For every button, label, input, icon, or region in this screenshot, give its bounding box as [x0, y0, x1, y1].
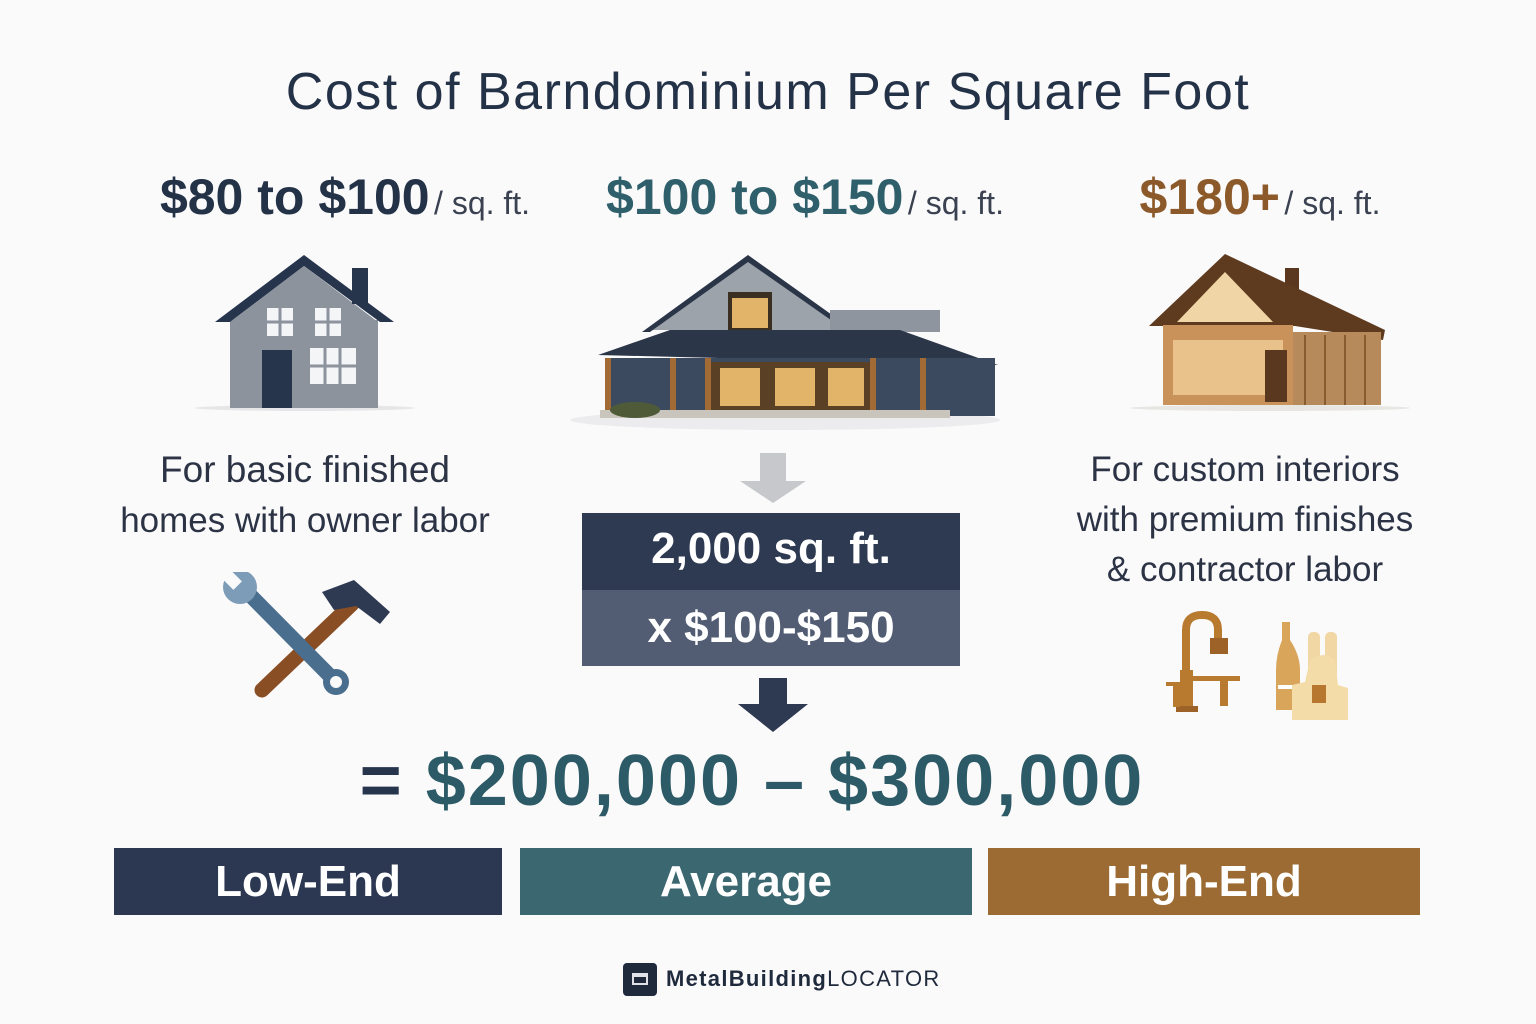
calculation box [582, 513, 960, 666]
bar: high-end: High-End [1106, 857, 1302, 906]
title: Cost of Barndominium Per Square Foot [286, 63, 1250, 121]
box: multiplier [582, 590, 960, 666]
icon: wrench and hammer [223, 572, 390, 698]
text: low-end description [120, 449, 490, 540]
arrow: dark down [738, 678, 808, 732]
bar: average: Average [660, 857, 832, 906]
price: low: $80 to $100 / sq. ft. [160, 169, 530, 225]
result total: = $200,000 – $300,000 [360, 741, 1144, 821]
price: high: $180+ / sq. ft. [1140, 169, 1380, 225]
text: high-end description [1076, 450, 1413, 589]
bar: low-end: Low-End [215, 857, 401, 906]
bar: average [520, 848, 972, 915]
box: multiplier: x $100-$150 [647, 603, 895, 652]
price: average: $100 to $150 / sq. ft. [606, 169, 1004, 225]
bar: high-end [988, 848, 1420, 915]
hammer head [322, 580, 390, 624]
icon: custom house [1130, 254, 1410, 411]
text: low-end description: For basic finished [160, 449, 450, 490]
icon: basic house [195, 255, 415, 411]
logo text: MetalBuildingLOCATOR [666, 966, 941, 991]
logo [623, 963, 941, 996]
text: high-end description: For custom interiors [1090, 450, 1400, 489]
text: low-end description: homes with owner labor [120, 501, 490, 540]
text: high-end description: & contractor labor [1107, 550, 1383, 589]
bar: low-end [114, 848, 502, 915]
wrench [247, 592, 334, 680]
icon: barndominium [570, 255, 1000, 430]
box: square footage [582, 513, 960, 590]
box: square footage: 2,000 sq. ft. [651, 524, 891, 573]
hammer handle [262, 604, 352, 690]
logo icon [623, 963, 657, 996]
text: high-end description: with premium finishes [1077, 500, 1413, 539]
arrow: gray down [740, 453, 806, 503]
icon: faucet and toiletries [1166, 611, 1348, 720]
